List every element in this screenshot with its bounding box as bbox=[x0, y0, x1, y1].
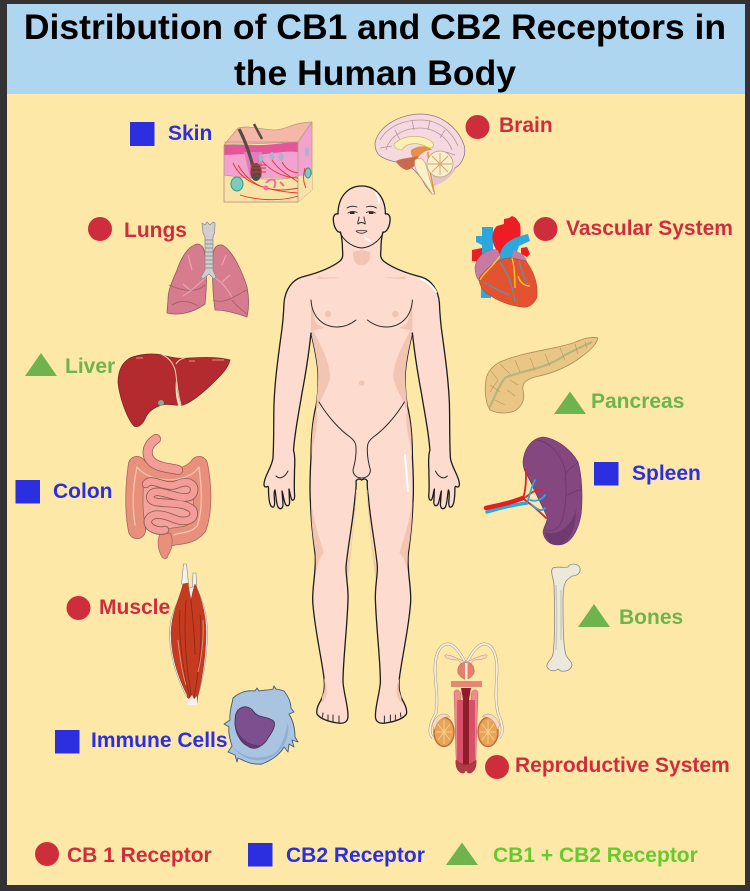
icon: femur bbox=[547, 564, 580, 671]
reproductive system: marker and label: Reproductive System bbox=[515, 754, 730, 777]
title: Distribution of CB1 and CB2 Receptors in bbox=[24, 7, 726, 47]
face centre, navel and highlights bbox=[356, 193, 436, 491]
legend: CB1 + CB2 receptor: CB1 + CB2 Receptor bbox=[493, 844, 698, 867]
skin: marker and label: Skin bbox=[168, 122, 212, 145]
immune cells: marker and label bbox=[55, 686, 298, 764]
legend bbox=[35, 842, 698, 867]
vascular system: marker and label: Vascular System bbox=[566, 217, 733, 240]
colon: marker and label: Colon bbox=[53, 480, 112, 503]
pancreas: marker and label bbox=[485, 337, 684, 414]
shading: neck, flank, legs bbox=[311, 250, 362, 703]
immune cells: marker and label: Immune Cells bbox=[91, 729, 228, 752]
icon: immune cell bbox=[224, 686, 298, 764]
icon: pancreas bbox=[485, 337, 598, 413]
liver: marker and label bbox=[25, 353, 230, 427]
icon: intestines bbox=[133, 439, 202, 558]
icon: heart bbox=[472, 216, 537, 307]
title: the Human Body bbox=[234, 53, 516, 93]
body left half bbox=[264, 186, 362, 723]
bones: marker and label bbox=[547, 564, 683, 671]
nipple and lines bbox=[325, 311, 331, 317]
pancreas: marker and label: Pancreas bbox=[591, 390, 684, 413]
icon: male reproductive organs bbox=[430, 644, 502, 773]
icon: muscle bbox=[170, 564, 208, 705]
icon: skin cross-section bbox=[224, 122, 312, 202]
human body figure bbox=[264, 186, 459, 723]
body right half (mirror) bbox=[362, 186, 459, 723]
legend: CB1 receptor: CB 1 Receptor bbox=[67, 844, 212, 867]
reproductive system: marker and label bbox=[430, 644, 730, 779]
legend: CB2 receptor: CB2 Receptor bbox=[286, 844, 425, 867]
brain: marker and label bbox=[375, 114, 553, 194]
icon: spleen bbox=[486, 437, 582, 545]
vascular system: marker and label bbox=[472, 216, 733, 307]
icon: lungs bbox=[167, 222, 248, 317]
spleen: marker and label bbox=[486, 437, 701, 545]
eye and brow bbox=[347, 206, 357, 213]
bones: marker and label: Bones bbox=[619, 606, 683, 629]
spleen: marker and label: Spleen bbox=[632, 462, 701, 485]
brain: marker and label: Brain bbox=[499, 114, 553, 137]
muscle: marker and label: Muscle bbox=[99, 596, 170, 619]
muscle: marker and label bbox=[66, 564, 208, 705]
title banner bbox=[7, 4, 745, 94]
icon: liver bbox=[118, 354, 230, 427]
skin: marker and label bbox=[130, 122, 312, 202]
colon: marker and label bbox=[16, 439, 202, 558]
lungs: marker and label bbox=[88, 217, 248, 317]
icon: brain bbox=[375, 114, 465, 194]
lungs: marker and label: Lungs bbox=[124, 219, 187, 242]
liver: marker and label: Liver bbox=[65, 355, 115, 378]
